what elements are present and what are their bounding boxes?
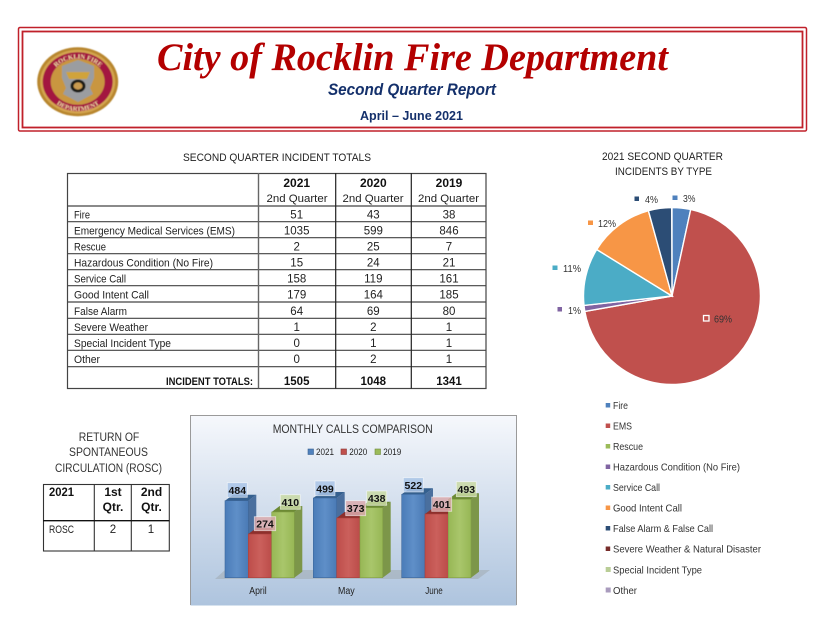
legend: EMS: EMS [613, 420, 632, 432]
row: incident totals: 1048 [361, 376, 387, 388]
subtitle: Second Quarter Report [328, 81, 497, 99]
category labels: May [338, 586, 355, 597]
row: false alarm: 69 [367, 306, 380, 318]
ROSC header [49, 485, 162, 514]
icon: fire department seal: ROCKLIN FIRE [52, 53, 103, 68]
ROSC header: 1st [104, 485, 122, 499]
chart floor [215, 570, 490, 579]
table header row: 2021 [283, 176, 310, 190]
row: good intent call: 164 [364, 290, 383, 302]
row: rescue: 25 [367, 242, 380, 254]
row: hazardous condition: Hazardous Condition (No Fire) [74, 258, 213, 270]
chart legend: 2020 [349, 447, 367, 458]
ROSC header: Qtr. [141, 500, 162, 514]
legend: fire [606, 400, 628, 412]
row: severe weather: Severe Weather [74, 322, 148, 334]
row: other: 0 [293, 354, 300, 366]
row: incident totals [166, 376, 462, 388]
slice: service call 11% [583, 250, 672, 305]
row: special incident type: 1 [446, 338, 452, 350]
category labels [249, 586, 443, 597]
table header row: 2nd Quarter [418, 193, 479, 205]
value: May 2020: 373 [347, 503, 365, 515]
legend: other: Other [613, 585, 637, 597]
label: 3% [672, 193, 696, 205]
row: hazardous condition: 24 [367, 258, 380, 270]
icon: fire department seal [36, 46, 119, 118]
slice: fire 3% [672, 208, 691, 296]
row: other [74, 354, 452, 366]
legend: false alarm and false call: False Alarm & False Call [613, 523, 713, 535]
row: false alarm: 80 [443, 306, 455, 318]
row: false alarm: 64 [290, 306, 304, 318]
legend: fire: Fire [613, 400, 628, 412]
pie legend [606, 400, 761, 597]
row: rescue [74, 242, 452, 254]
row: EMS: Emergency Medical Services (EMS) [74, 226, 235, 238]
ROSC header: 2021 [49, 485, 74, 499]
chart legend: 2021 [316, 447, 334, 458]
row: incident totals: 1505 [284, 376, 310, 388]
heading: pie chart: 2021 SECOND QUARTER [602, 151, 723, 163]
row: fire: 51 [290, 210, 303, 222]
row: severe weather: 1 [446, 322, 452, 334]
row: EMS: 1035 [284, 226, 309, 238]
legend: special incident type: Special Incident Type [613, 564, 702, 576]
table header row: 2nd Quarter [342, 193, 404, 205]
row: severe weather [74, 322, 452, 334]
row: false alarm [74, 306, 455, 318]
row: service call: 161 [439, 274, 459, 286]
label: 69%: 69% [714, 314, 732, 326]
label: 12% [588, 218, 616, 230]
row: rescue: Rescue [74, 242, 106, 254]
pie chart: incidents by type [583, 208, 760, 384]
row: special incident type [74, 338, 452, 350]
row: service call [74, 274, 459, 286]
row: rescue: 2 [293, 242, 300, 254]
bars: April [225, 495, 302, 578]
legend: EMS [606, 420, 632, 432]
heading: incident totals: SECOND QUARTER INCIDENT TOTALS [183, 152, 371, 164]
row: fire: Fire [74, 210, 90, 222]
label: 4%: 4% [645, 194, 658, 206]
bars: June [402, 488, 479, 578]
row: severe weather: 2 [370, 322, 377, 334]
ROSC header: Qtr. [103, 500, 123, 514]
row: incident totals: INCIDENT TOTALS: [166, 376, 253, 388]
heading: ROSC: CIRCULATION (ROSC) [55, 463, 162, 475]
table header row [266, 176, 479, 205]
slice: EMS 69% [585, 210, 760, 384]
icon: fire department seal: DEPARTMENT [56, 100, 99, 112]
label: 11% [552, 263, 581, 275]
row: other: Other [74, 354, 100, 366]
label: 12%: 12% [598, 218, 616, 230]
heading: pie chart [602, 151, 723, 178]
label: 1% [558, 305, 581, 317]
row: fire: 43 [367, 210, 380, 222]
legend: good intent call: Good Intent Call [613, 502, 682, 514]
row: service call: 119 [364, 274, 382, 286]
header banner [18, 26, 808, 132]
label: 11%: 11% [563, 263, 581, 275]
row: EMS [74, 226, 459, 238]
heading: pie chart: INCIDENTS BY TYPE [615, 166, 712, 178]
legend: rescue: Rescue [613, 441, 643, 453]
row: good intent call: 179 [287, 290, 306, 302]
value: June 2021: 522 [405, 480, 422, 492]
ROSC row: 1 [148, 524, 154, 536]
value: May 2021: 499 [316, 483, 334, 495]
value: April 2019: 410 [282, 497, 299, 509]
value: April 2020: 274 [256, 519, 274, 531]
slice: false alarm 4% [648, 208, 672, 296]
row: special incident type: 0 [293, 338, 300, 350]
value: June 2020: 401 [433, 499, 451, 511]
slice: good intent call 12% [597, 211, 672, 296]
ROSC row: 2 [110, 524, 116, 536]
row: hazardous condition [74, 258, 455, 270]
data labels [227, 478, 476, 531]
ROSC row: ROSC [49, 524, 74, 536]
category labels: June [425, 586, 443, 597]
row: hazardous condition: 15 [290, 258, 303, 270]
label: 4% [634, 194, 658, 206]
row: rescue: 7 [446, 242, 452, 254]
row: other: 1 [446, 354, 452, 366]
chart legend [308, 447, 401, 458]
table: second quarter incident totals [67, 173, 486, 388]
row: special incident type: Special Incident Type [74, 338, 171, 350]
label: 69% [704, 314, 732, 326]
row: service call: 158 [287, 274, 306, 286]
date range: April – June 2021 [360, 108, 463, 123]
chart title: MONTHLY CALLS COMPARISON [273, 422, 433, 436]
row: hazardous condition: 21 [443, 258, 455, 270]
heading: ROSC: RETURN OF [79, 432, 139, 444]
pie data labels [552, 193, 732, 326]
label: 3%: 3% [683, 193, 696, 205]
heading: ROSC [55, 432, 162, 475]
row: fire [74, 210, 455, 222]
row: EMS: 846 [439, 226, 459, 238]
row: other: 2 [370, 354, 377, 366]
category labels: April [249, 586, 267, 597]
ROSC header: 2nd [141, 485, 162, 499]
chart legend: 2019 [383, 447, 401, 458]
ROSC row [49, 524, 154, 536]
label: 1%: 1% [568, 305, 581, 317]
slice: hazardous condition 1% [584, 296, 672, 311]
title: City of Rocklin Fire Department [157, 36, 669, 79]
row: false alarm: False Alarm [74, 306, 127, 318]
row: EMS: 599 [364, 226, 383, 238]
row: good intent call [74, 290, 459, 302]
value: June 2019: 493 [458, 484, 475, 496]
legend: hazardous condition: Hazardous Condition (No Fire) [613, 462, 740, 474]
row: severe weather: 1 [293, 322, 300, 334]
table header row: 2nd Quarter [266, 193, 328, 205]
legend: severe weather and natural disaster: Severe Weather & Natural Disaster [613, 544, 761, 556]
table: ROSC [43, 484, 170, 551]
value: May 2019: 438 [368, 493, 386, 505]
row: fire: 38 [443, 210, 455, 222]
table header row: 2019 [436, 176, 463, 190]
bars: May [313, 492, 391, 578]
row: service call: Service Call [74, 274, 126, 286]
chart panel: monthly calls comparison [190, 416, 516, 606]
row: good intent call: 185 [439, 290, 459, 302]
table header row: 2020 [360, 176, 387, 190]
row: good intent call: Good Intent Call [74, 290, 149, 302]
heading: ROSC: SPONTANEOUS [69, 447, 148, 459]
value: April 2021: 484 [229, 485, 246, 497]
row: incident totals: 1341 [436, 376, 462, 388]
legend: service call: Service Call [613, 482, 660, 494]
row: special incident type: 1 [370, 338, 377, 350]
